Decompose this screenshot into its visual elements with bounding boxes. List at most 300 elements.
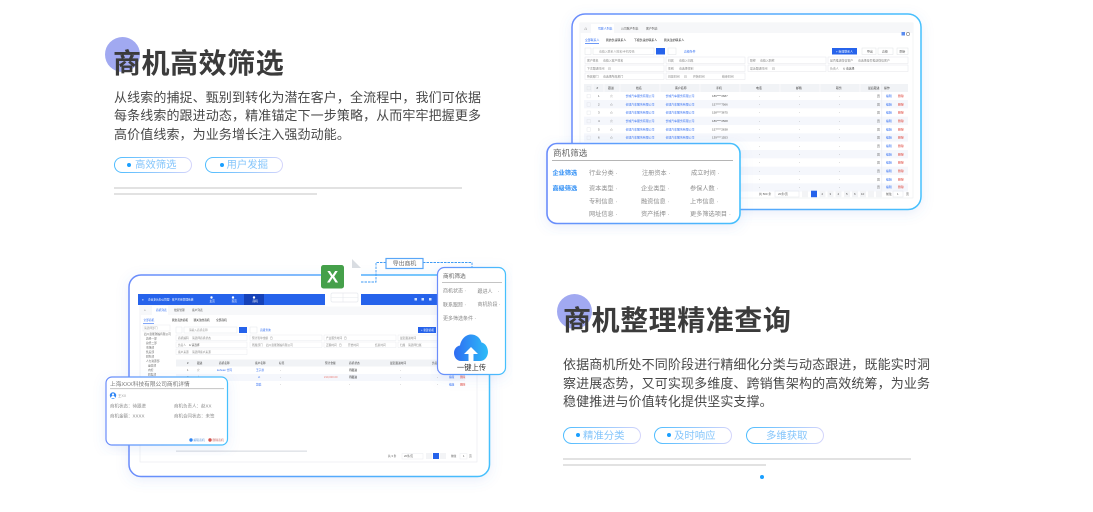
app mockup: contacts table: 186****2568 bbox=[712, 119, 728, 123]
app mockup: opportunity table: 跟进 bbox=[197, 361, 203, 365]
action buttons bbox=[189, 438, 224, 442]
app mockup: contacts table: 结束时间 bbox=[722, 73, 734, 78]
tag: 多维获取: 多维获取 bbox=[766, 430, 808, 442]
app mockup: contacts table: - bbox=[839, 136, 840, 140]
app mockup: contacts table: ⌂ bbox=[584, 26, 588, 31]
app mockup: contacts table: 编辑 bbox=[886, 184, 892, 189]
detail fields bbox=[110, 402, 215, 420]
app mockup: opportunity table: 商机名称 bbox=[219, 361, 230, 365]
app mockup: contacts table: 最近跟进时间 bbox=[750, 65, 767, 70]
panel: contacts list screenshot bbox=[572, 14, 921, 210]
app mockup: opportunity table: 标签 bbox=[279, 361, 285, 365]
app mockup: contacts table: 长城汽车服务有限公司 bbox=[626, 118, 655, 123]
app mockup: opportunity table: 日 bbox=[339, 344, 342, 347]
app mockup: contacts table: - bbox=[759, 161, 760, 165]
app mockup: opportunity table: 编辑 bbox=[449, 368, 455, 372]
app mockup: contacts table: - bbox=[799, 169, 800, 173]
label: 导出商机: 导出商机 bbox=[393, 260, 416, 268]
app mockup: opportunity table: 请选择部门 bbox=[144, 326, 158, 330]
app mockup: contacts table: - bbox=[759, 119, 760, 123]
accent circle bbox=[105, 37, 140, 72]
app mockup: contacts table: 请选择所属部门 bbox=[603, 73, 623, 78]
panel: opportunity list screenshot bbox=[129, 275, 490, 476]
app mockup: contacts table: 员 bbox=[877, 119, 880, 123]
app mockup: contacts table: - bbox=[839, 144, 840, 148]
app mockup: contacts table: 职称 bbox=[750, 57, 756, 62]
filter category labels: 企业筛选 bbox=[552, 169, 578, 177]
app mockup: contacts table: - bbox=[839, 111, 840, 115]
app mockup: contacts table: 编辑 bbox=[886, 151, 892, 156]
app mockup: contacts table: 长城汽车服务有限公司 bbox=[666, 135, 695, 140]
description text: 稳健推进与价值转化提供坚实支撑。 bbox=[563, 394, 773, 409]
app mockup: opportunity table: 商机 bbox=[252, 299, 258, 303]
filter options: 联系跟踪 · bbox=[443, 302, 466, 308]
app mockup: opportunity table: 请选择归属 bbox=[408, 343, 422, 347]
app mockup: opportunity table: - bbox=[280, 376, 281, 379]
app mockup: opportunity table: 主页 bbox=[210, 299, 215, 303]
app mockup: opportunity table: 开始时间 bbox=[348, 343, 359, 347]
app mockup: opportunity table: 首页 bbox=[232, 299, 237, 303]
app mockup: opportunity table: 请选择商机状态 bbox=[192, 336, 211, 340]
app mockup: contacts table: 开始时间 bbox=[693, 73, 705, 78]
app mockup: contacts table: - bbox=[759, 111, 760, 115]
app mockup: contacts table: 6 bbox=[854, 192, 856, 196]
app mockup: contacts table: 邮箱 bbox=[796, 85, 802, 90]
tag: 精准分类: 精准分类 bbox=[583, 430, 625, 442]
app mockup: contacts table: 日 bbox=[772, 66, 775, 70]
app mockup: opportunity table: 预计金额 bbox=[325, 361, 336, 365]
app mockup: contacts table: 手机 bbox=[716, 85, 722, 90]
app mockup: contacts table: 我的负责联系人 bbox=[606, 37, 626, 42]
app mockup: opportunity table: 删除 bbox=[460, 368, 466, 372]
app mockup: opportunity table: 客户来源 bbox=[178, 350, 189, 354]
app mockup: contacts table: 员 bbox=[877, 152, 880, 156]
app mockup: contacts table: 员 bbox=[877, 161, 880, 165]
app mockup: contacts table: - bbox=[839, 169, 840, 173]
app mockup: opportunity table: 人力资源部 bbox=[146, 359, 160, 363]
filter options: 参保人数 · bbox=[690, 184, 719, 192]
detail fields: 商机合同状态：未签 bbox=[174, 413, 215, 420]
app mockup: opportunity table: 市场部 bbox=[146, 346, 154, 350]
app mockup: opportunity table: 最近跟进时间 bbox=[400, 336, 416, 340]
app mockup: contacts table: 删除 bbox=[898, 126, 904, 131]
app mockup: contacts table: 性别 bbox=[668, 65, 674, 70]
filter options: 融资信息 · bbox=[641, 198, 670, 206]
app mockup: contacts table: 3 bbox=[598, 111, 600, 115]
upload label: 一键上传 bbox=[457, 363, 486, 372]
app mockup: contacts table: 157****2638 bbox=[712, 127, 728, 131]
app mockup: opportunity table: 客户名称 bbox=[255, 361, 266, 365]
app mockup: contacts table: - bbox=[839, 102, 840, 106]
app mockup: opportunity table: 慧聪 bbox=[256, 382, 262, 386]
app mockup: contacts table: - bbox=[839, 161, 840, 165]
app mockup: contacts table: - bbox=[759, 94, 760, 98]
panel: upload filter overlay bbox=[438, 268, 506, 374]
app mockup: contacts table: ☆ bbox=[610, 93, 613, 98]
app mockup: opportunity table: 负责人 bbox=[432, 361, 440, 365]
app mockup: contacts table: 长城汽车服务有限公司 bbox=[666, 93, 695, 98]
app mockup: opportunity table: - bbox=[400, 376, 401, 379]
app mockup: contacts table: - bbox=[799, 144, 800, 148]
app mockup: opportunity table: 日 bbox=[270, 337, 273, 340]
app mockup: opportunity table: 页 bbox=[469, 454, 472, 458]
app mockup: opportunity table: 所属部门 bbox=[252, 343, 263, 347]
app mockup: opportunity table: 售后部 bbox=[146, 350, 154, 354]
app mockup: opportunity table: - bbox=[437, 376, 438, 379]
filter options: 商机状态 · bbox=[443, 288, 466, 294]
app mockup: contacts table: 长城汽车服务有限公司 bbox=[626, 126, 655, 131]
app mockup: opportunity table: 负责人 bbox=[178, 343, 186, 347]
app mockup: contacts table: - bbox=[759, 136, 760, 140]
section: opportunity organization text bbox=[557, 294, 930, 479]
app mockup: contacts table: 长城汽车服务有限公司 bbox=[626, 93, 655, 98]
divider long bbox=[563, 458, 911, 460]
app mockup: opportunity table: 20条/页 bbox=[404, 454, 413, 458]
app mockup: contacts table: 编辑 bbox=[886, 143, 892, 148]
app mockup: contacts table: 删除 bbox=[898, 160, 904, 165]
app mockup: contacts table: 1 bbox=[897, 192, 899, 196]
app mockup: contacts table: 日 bbox=[608, 66, 611, 70]
app mockup: opportunity table: ☆ bbox=[197, 375, 200, 379]
app mockup: contacts table: 删除 bbox=[898, 135, 904, 140]
app mockup: opportunity table: - bbox=[437, 384, 438, 386]
app mockup: contacts table: 员 bbox=[877, 144, 880, 148]
app mockup: contacts table: 请输入客户姓名 bbox=[603, 57, 623, 62]
app mockup: contacts table: 负责人 bbox=[830, 65, 839, 70]
app mockup: opportunity table: 正确时间 bbox=[326, 343, 337, 347]
app mockup: contacts table: 前往 bbox=[886, 191, 892, 196]
detail fields: 商机负责人：赵XX bbox=[174, 402, 212, 409]
app mockup: contacts table: 高级 bbox=[882, 48, 888, 53]
app mockup: contacts table: 员 bbox=[877, 177, 880, 181]
app mockup: opportunity table: 运营部 bbox=[148, 364, 156, 368]
app mockup: contacts table: 20条/页 bbox=[778, 191, 788, 196]
app mockup: contacts table: 3 bbox=[830, 192, 832, 196]
app mockup: contacts table: 158****3675 bbox=[712, 111, 728, 115]
app mockup: contacts table: 4 bbox=[838, 192, 840, 196]
app mockup: contacts table: - bbox=[759, 185, 760, 189]
app mockup: opportunity table: 内控 bbox=[148, 368, 154, 372]
filter options: 跟进人 · bbox=[478, 288, 500, 295]
tag: 及时响应: 及时响应 bbox=[674, 430, 716, 442]
app mockup: contacts table: 编辑 bbox=[886, 176, 892, 181]
app mockup: contacts table: 下级负责的联系人 bbox=[634, 37, 657, 42]
app mockup: contacts table: 139****1553 bbox=[712, 136, 728, 140]
app mockup: opportunity table: - bbox=[280, 369, 281, 372]
panel: 商机筛选 overlay card bbox=[547, 144, 740, 224]
app mockup: contacts table: 最后跟进 bbox=[868, 85, 880, 90]
icon: exported sheet paper bbox=[325, 259, 361, 306]
app mockup: contacts table: 员 bbox=[877, 185, 880, 189]
app mockup: opportunity table: 归属 bbox=[400, 343, 406, 347]
filter options: 商机阶段 · bbox=[478, 301, 501, 308]
app mockup: contacts table: 186****2687 bbox=[712, 94, 728, 98]
app mockup: contacts table: 跟进 bbox=[608, 85, 614, 90]
app mockup: contacts table: - bbox=[799, 152, 800, 156]
app mockup: opportunity table: ¥10,000.00 bbox=[324, 375, 338, 379]
heading: 商机整理精准查询: 商机整理精准查询 bbox=[563, 305, 791, 336]
description text: 察进展态势，又可实现多维度、跨销售架构的高效统筹，为业务 bbox=[563, 376, 930, 390]
app mockup: contacts table: 5 bbox=[846, 192, 848, 196]
tag: 高效筛选 bbox=[114, 156, 192, 173]
app mockup: opportunity table: - bbox=[349, 384, 350, 386]
tag: 精准分类 bbox=[563, 427, 641, 444]
app mockup: opportunity table: 删除 bbox=[460, 382, 466, 386]
description text bbox=[114, 90, 481, 142]
app mockup: contacts table: 编辑 bbox=[886, 126, 892, 131]
icon: upload cloud bbox=[454, 334, 488, 362]
app mockup: contacts table: 电话 bbox=[756, 85, 762, 90]
description text bbox=[563, 357, 930, 409]
label: 导出商机 bbox=[386, 258, 423, 268]
filter options: 专利信息 · bbox=[589, 198, 618, 206]
app mockup: opportunity table: 商机状态 bbox=[349, 361, 360, 365]
divider long bbox=[114, 187, 462, 188]
app mockup: contacts table: - bbox=[799, 136, 800, 140]
app mockup: contacts table: 请选择是否推送微信客户 bbox=[858, 57, 890, 62]
app mockup: contacts table: 删除 bbox=[898, 93, 904, 98]
action buttons: 删除商机 bbox=[212, 438, 224, 442]
app mockup: contacts table: 编辑 bbox=[886, 135, 892, 140]
app mockup: contacts table: 编辑 bbox=[886, 110, 892, 115]
app mockup: opportunity table: 商机列表 bbox=[156, 308, 167, 312]
app mockup: opportunity table bbox=[138, 294, 477, 462]
app mockup: opportunity table: & 请选择 bbox=[189, 343, 200, 347]
filter options: 更多筛选项目 · bbox=[690, 210, 731, 218]
app mockup: opportunity table: 我关注的商机 bbox=[194, 318, 210, 322]
app mockup: contacts table: 删除 bbox=[898, 143, 904, 148]
app mockup: contacts table: 删除 bbox=[898, 168, 904, 173]
app mockup: opportunity table: 线索管理 bbox=[174, 308, 185, 312]
app mockup: contacts table: & 请选择 bbox=[843, 65, 855, 70]
filter category labels: 高级筛选 bbox=[552, 184, 578, 192]
app mockup: contacts table: 长城汽车服务有限公司 bbox=[626, 135, 655, 140]
app mockup: contacts table: 刷新 bbox=[900, 48, 905, 53]
app mockup: opportunity table: - bbox=[437, 369, 438, 372]
app mockup: opportunity table: 产业服务时间 bbox=[326, 336, 342, 340]
overlay title: 上海XXX科技有限公司商机详情 bbox=[110, 380, 190, 388]
section: lead filtering text bbox=[105, 37, 481, 195]
filter options: 上市信息 · bbox=[690, 198, 719, 206]
app mockup: opportunity table: 商机编码 bbox=[178, 336, 189, 340]
app mockup: contacts table: 请输入联系人姓名/手机号码 bbox=[599, 48, 635, 53]
description text: 依据商机所处不同阶段进行精细化分类与动态跟进，既能实时洞 bbox=[563, 357, 930, 372]
filter options: 注册资本 · bbox=[642, 169, 671, 177]
app mockup: contacts table: + 新建联系人 bbox=[836, 48, 853, 53]
filter options bbox=[443, 288, 501, 322]
app mockup: contacts table: 是否推送微信客户 bbox=[830, 57, 853, 62]
app mockup: contacts table: 编辑 bbox=[886, 93, 892, 98]
app mockup: contacts table: 所属部门 bbox=[587, 73, 599, 78]
app mockup: opportunity table: kehuan 合同 bbox=[217, 368, 232, 372]
app mockup: contacts table: 客户名称 bbox=[675, 85, 687, 90]
app mockup: contacts table: 员 bbox=[877, 111, 880, 115]
app mockup: contacts table: 2 bbox=[822, 192, 824, 196]
app mockup: opportunity table: 请选择客户来源 bbox=[192, 350, 211, 354]
app mockup: contacts table: 2 bbox=[598, 102, 600, 106]
app mockup: contacts table: 编辑 bbox=[886, 168, 892, 173]
app mockup: contacts table: 员 bbox=[877, 169, 880, 173]
app mockup: opportunity table: ≡ bbox=[142, 298, 144, 301]
app mockup: contacts table: - bbox=[839, 119, 840, 123]
app mockup: opportunity table: 财务部 bbox=[146, 354, 154, 358]
app mockup: contacts table: 全部联系人 bbox=[585, 37, 600, 42]
app mockup: opportunity table: 客户列表 bbox=[192, 308, 203, 312]
app mockup: contacts table: 长城汽车服务有限公司 bbox=[626, 110, 655, 115]
app mockup: contacts table: - bbox=[759, 152, 760, 156]
app mockup: contacts table: 删除 bbox=[898, 118, 904, 123]
app mockup: opportunity table: 研发部 bbox=[148, 372, 156, 376]
panel: opportunity detail overlay bbox=[106, 377, 228, 445]
description text: 从线索的捕捉、甄别到转化为潜在客户，全流程中，我们可依据 bbox=[114, 90, 481, 104]
app mockup: contacts table: 员 bbox=[877, 94, 880, 98]
app mockup: contacts table: 157****7566 bbox=[712, 102, 728, 106]
app mockup: contacts table: - bbox=[759, 102, 760, 106]
accent circle bbox=[557, 294, 592, 329]
app mockup: contacts table: - bbox=[799, 185, 800, 189]
app mockup: contacts table: 编辑 bbox=[886, 118, 892, 123]
app mockup: contacts table: 客户列表 bbox=[646, 26, 658, 30]
app mockup: contacts table: - bbox=[759, 177, 760, 181]
app mockup: opportunity table: ⌂ bbox=[144, 309, 146, 312]
app mockup: opportunity table: 请输入商机名称 bbox=[189, 328, 208, 332]
filter options: 成立时间 · bbox=[691, 169, 720, 177]
app mockup: contacts table: 删除 bbox=[898, 176, 904, 181]
app mockup: contacts table: 员 bbox=[877, 136, 880, 140]
detail fields: 商机状态：待跟进 bbox=[110, 402, 146, 409]
app mockup: contacts table: - bbox=[759, 127, 760, 131]
filter options bbox=[589, 169, 731, 218]
overlay title: 商机筛选 bbox=[443, 272, 466, 280]
app mockup: opportunity table: 前往 bbox=[451, 454, 457, 458]
app mockup: contacts table: - bbox=[839, 127, 840, 131]
icon: excel: X bbox=[327, 268, 339, 286]
app mockup: opportunity table: - bbox=[400, 384, 401, 386]
app mockup: opportunity table: 最近跟进时间 bbox=[390, 361, 406, 365]
app mockup: contacts table: 页 bbox=[906, 192, 909, 196]
tag: 多维获取 bbox=[746, 427, 824, 444]
app mockup: opportunity table: 待跟进 bbox=[349, 375, 357, 379]
description text: 高价值线索，为业务增长注入强劲动能。 bbox=[114, 126, 350, 142]
app mockup: contacts table: 公司账户列表 bbox=[621, 26, 638, 30]
app mockup: opportunity table: - bbox=[280, 384, 281, 386]
app mockup: contacts table: 请输入职称 bbox=[760, 57, 775, 62]
app mockup: opportunity table: 总经二部 bbox=[146, 341, 157, 345]
app mockup: contacts table: 1 bbox=[598, 94, 600, 98]
app mockup: contacts table: 10 bbox=[861, 192, 865, 196]
app mockup: contacts table: ☆ bbox=[610, 126, 613, 131]
app mockup: contacts table: # bbox=[596, 86, 598, 90]
app mockup: opportunity table: 删除 bbox=[460, 375, 466, 379]
app mockup: opportunity table: 2 bbox=[187, 375, 189, 379]
app mockup: contacts table: 删除 bbox=[898, 184, 904, 189]
app mockup: opportunity table: 我负责的商机 bbox=[172, 318, 188, 322]
app mockup: contacts table: 编辑 bbox=[886, 160, 892, 165]
filter options: 企业类型 · bbox=[641, 184, 670, 192]
app mockup: opportunity table: ☆ bbox=[197, 368, 200, 372]
filter options: 更多筛选条件 · bbox=[443, 315, 476, 322]
app mockup: contacts table: 下次跟进时间 bbox=[587, 65, 604, 70]
app mockup: contacts table: 5 bbox=[598, 127, 600, 131]
app mockup: contacts table: 操作 bbox=[884, 85, 890, 90]
filter options: 资本类型 · bbox=[589, 184, 618, 192]
divider short bbox=[563, 464, 766, 466]
filter options: 网址信息 · bbox=[589, 210, 618, 218]
app mockup: contacts table: 客户姓名 bbox=[587, 57, 599, 62]
app mockup: contacts table: - bbox=[799, 94, 800, 98]
filter category labels bbox=[552, 169, 578, 192]
app mockup: opportunity table: 王子豪 bbox=[256, 368, 264, 372]
app mockup: opportunity table: 四川嘉能瑞福有限公司 bbox=[266, 343, 293, 347]
app mockup: contacts table: - bbox=[799, 177, 800, 181]
app mockup: contacts table bbox=[580, 23, 913, 198]
app mockup: opportunity table: 预计签单金额 bbox=[252, 336, 268, 340]
app mockup: opportunity table: xt bbox=[258, 375, 260, 379]
app mockup: contacts table: 驾驶人列表 bbox=[598, 26, 613, 30]
app mockup: opportunity table: 编辑 bbox=[449, 375, 455, 379]
app mockup: contacts table: - bbox=[799, 102, 800, 106]
app mockup: opportunity table: 结束时间 bbox=[375, 343, 386, 347]
app mockup: opportunity table: 企业多台办公管理 · 客户关系管理系统 bbox=[148, 297, 194, 301]
app mockup: opportunity table: + 新建商机 bbox=[421, 328, 434, 332]
filter options: 行业分类 · bbox=[589, 169, 618, 177]
divider short bbox=[114, 193, 317, 194]
connector: export dashed arrow bbox=[361, 262, 472, 282]
app mockup: contacts table: 共 500 条 bbox=[759, 191, 771, 196]
action buttons: 编辑商机 bbox=[194, 438, 205, 442]
app mockup: opportunity table: # bbox=[187, 361, 189, 365]
tag: 高效筛选: 高效筛选 bbox=[135, 160, 177, 171]
app mockup: contacts table: - bbox=[799, 111, 800, 115]
app mockup: contacts table: 编辑 bbox=[886, 101, 892, 106]
app mockup: opportunity table: 编辑 bbox=[449, 382, 455, 386]
app mockup: contacts table: 长城汽车服务有限公司 bbox=[666, 110, 695, 115]
app mockup: contacts table: - bbox=[799, 119, 800, 123]
app mockup: contacts table: - bbox=[839, 152, 840, 156]
app mockup: contacts table: 日 bbox=[684, 74, 687, 78]
icon: excel bbox=[321, 265, 344, 288]
app mockup: contacts table: 长城汽车服务有限公司 bbox=[666, 126, 695, 131]
app mockup: opportunity table: 高级查询 bbox=[260, 328, 271, 332]
app mockup: opportunity table: 全部商机 bbox=[144, 318, 155, 322]
heading: 商机高效筛选: 商机高效筛选 bbox=[113, 48, 284, 79]
app mockup: contacts table: - bbox=[839, 185, 840, 189]
app mockup: contacts table: ☆ bbox=[610, 135, 613, 140]
app mockup: contacts table: 员 bbox=[877, 102, 880, 106]
description text: 每条线索的跟进动态，精准锚定下一步策略，从而牢牢把握更多 bbox=[114, 108, 481, 123]
detail fields: 商机金额：XXXX bbox=[110, 413, 145, 420]
app mockup: contacts table: - bbox=[839, 94, 840, 98]
app mockup: contacts table: 长城汽车服务有限公司 bbox=[666, 101, 695, 106]
app mockup: opportunity table: - bbox=[400, 369, 401, 372]
app mockup: contacts table: 4 bbox=[598, 119, 600, 123]
app mockup: contacts table: 创建时间 bbox=[668, 73, 680, 78]
app mockup: opportunity table: 1 bbox=[463, 454, 465, 458]
app mockup: opportunity table: 共 3 条 bbox=[388, 454, 397, 458]
app mockup: opportunity table: 四川嘉能瑞福有限公司 bbox=[144, 332, 171, 336]
tag: 用户发掘: 用户发掘 bbox=[226, 160, 268, 171]
app mockup: contacts table: ☆ bbox=[610, 101, 613, 106]
app mockup: contacts table: - bbox=[759, 144, 760, 148]
app mockup: opportunity table: 总经一部 bbox=[146, 336, 157, 340]
avatar: 王XX bbox=[118, 394, 127, 398]
app mockup: contacts table: 归属 bbox=[668, 57, 674, 62]
app mockup: contacts table: ☆ bbox=[610, 118, 613, 123]
app mockup: contacts table: 我关注的联系人 bbox=[664, 37, 684, 42]
decorative dot bbox=[760, 474, 764, 478]
app mockup: opportunity table: 全部商机 bbox=[216, 318, 227, 322]
app mockup: contacts table: 请选择性别 bbox=[679, 65, 694, 70]
